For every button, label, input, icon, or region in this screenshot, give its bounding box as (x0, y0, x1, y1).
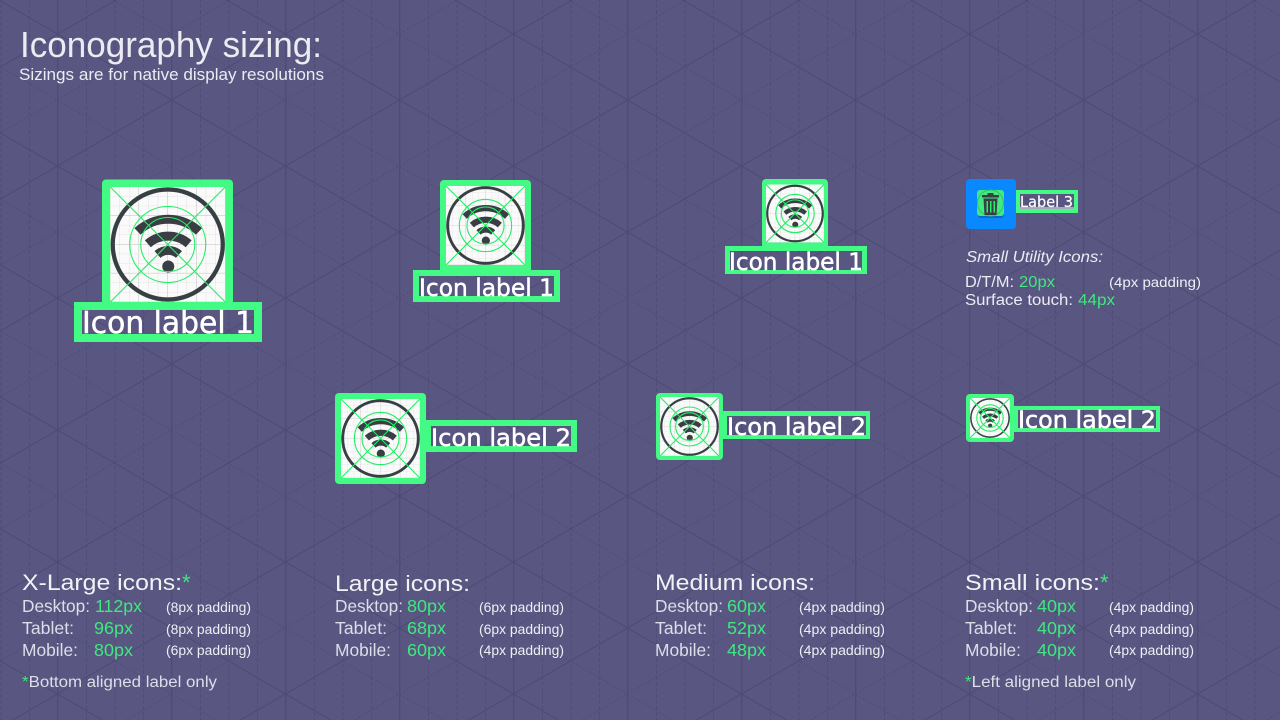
spec: small icons: 40px (1037, 640, 1076, 660)
spec: large icons: 80px (407, 596, 446, 616)
spec: x-large icons: (8px padding) (166, 622, 251, 637)
text: small utility icons spec: 44px (1078, 292, 1115, 309)
spec: medium icons: 48px (727, 640, 766, 660)
spec: small icons: *Left aligned label only (965, 674, 1136, 691)
label: x-large: Icon label 1 (82, 306, 254, 341)
spec: small icons: (4px padding) (1109, 622, 1194, 637)
icon: small utility trash (966, 179, 1016, 229)
text: small utility icons spec: 20px (1019, 274, 1055, 291)
spec: small icons: Tablet: (965, 618, 1017, 638)
spec: x-large icons: *Bottom aligned label only (22, 674, 217, 691)
icon: large bottom label (413, 180, 560, 302)
spec: x-large icons: 96px (94, 618, 133, 638)
spec: x-large icons: (6px padding) (166, 643, 251, 658)
spec: small icons: 40px (1037, 596, 1076, 616)
subtitle: Sizings are for native display resolutions (19, 65, 324, 84)
spec: x-large icons: Desktop: (22, 596, 90, 616)
label: large left: Icon label 2 (431, 424, 571, 452)
spec: x-large icons: * (182, 570, 191, 595)
spec: small icons: (4px padding) (1109, 600, 1194, 615)
spec: large icons: Desktop: (335, 596, 403, 616)
icon: large left label (335, 393, 577, 484)
spec: medium icons: Tablet: (655, 618, 707, 638)
spec: medium icons: Medium icons: (655, 570, 815, 595)
title: Iconography sizing: (20, 24, 322, 65)
spec: small icons: Mobile: (965, 640, 1021, 660)
spec: x-large icons: X-Large icons: (22, 570, 182, 595)
icon: x-large bottom label (74, 180, 262, 342)
spec: medium icons: 52px (727, 618, 766, 638)
spec: large icons: (4px padding) (479, 643, 564, 658)
spec: medium icons: (4px padding) (799, 600, 885, 615)
spec: small icons: Desktop: (965, 596, 1033, 616)
label: small left: Icon label 2 (1018, 406, 1156, 434)
label: utility: Label 3 (1020, 193, 1073, 211)
spec: small icons: * (1100, 570, 1109, 595)
spec: medium icons (655, 570, 885, 660)
icon: small left label (966, 394, 1160, 442)
spec: small icons: 40px (1037, 618, 1076, 638)
spec: medium icons: Desktop: (655, 596, 723, 616)
text: small utility icons spec (965, 249, 1201, 309)
spec: large icons: Mobile: (335, 640, 391, 660)
spec: large icons: (6px padding) (479, 600, 564, 615)
spec: x-large icons: Tablet: (22, 618, 74, 638)
spec: small icons (965, 570, 1194, 691)
text: small utility icons spec: D/T/M: (965, 274, 1014, 291)
spec: large icons: 60px (407, 640, 446, 660)
spec: small icons: (4px padding) (1109, 643, 1194, 658)
spec: large icons: 68px (407, 618, 446, 638)
label: medium left: Icon label 2 (727, 413, 866, 441)
spec: x-large icons: Mobile: (22, 640, 78, 660)
text: small utility icons spec: Surface touch: (965, 292, 1073, 309)
spec: small icons: Small icons: (965, 570, 1100, 595)
icon: medium bottom label (725, 179, 867, 276)
label: large bottom: Icon label 1 (419, 274, 554, 302)
spec: large icons (335, 571, 564, 660)
spec: x-large icons: 112px (95, 596, 142, 616)
text: small utility icons spec: (4px padding) (1109, 275, 1201, 290)
spec: medium icons: 60px (727, 596, 766, 616)
icon: medium left label (656, 393, 870, 460)
spec: x-large icons: (8px padding) (166, 600, 251, 615)
spec: x-large icons (22, 570, 251, 691)
spec: large icons: (6px padding) (479, 622, 564, 637)
spec: medium icons: Mobile: (655, 640, 711, 660)
spec: medium icons: (4px padding) (799, 643, 885, 658)
spec: large icons: Tablet: (335, 618, 387, 638)
spec: large icons: Large icons: (335, 571, 470, 596)
spec: medium icons: (4px padding) (799, 622, 885, 637)
spec: x-large icons: 80px (94, 640, 133, 660)
text: small utility icons spec: Small Utility Icons: (966, 249, 1103, 266)
label: medium bottom: Icon label 1 (729, 248, 863, 276)
